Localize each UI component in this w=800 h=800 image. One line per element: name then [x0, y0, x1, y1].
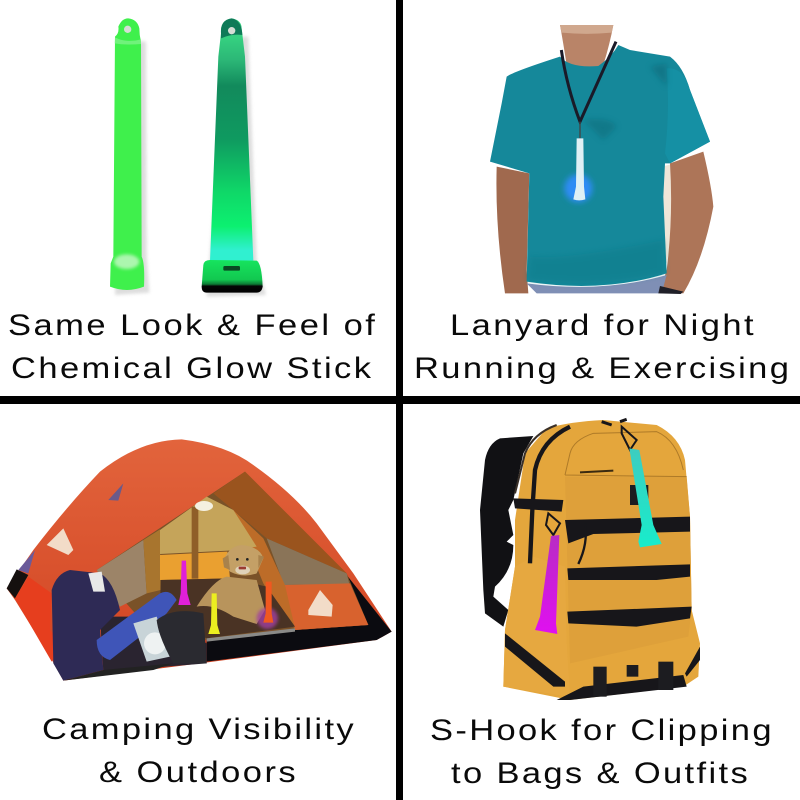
illustration: man wearing shirt with lanyard: [490, 25, 713, 294]
caption: lanyard: [414, 308, 789, 384]
caption: same look and feel: Chemical Glow Stick: [11, 351, 372, 384]
caption: same look and feel: Same Look & Feel of: [8, 308, 376, 341]
illustration: tent with dog and glow sticks: [7, 439, 392, 681]
tent logo marks: [47, 528, 73, 555]
seams: [565, 432, 687, 477]
panel: camping: [7, 439, 392, 681]
lower clothes: [527, 275, 667, 293]
back strap: [480, 436, 533, 627]
glow stick pendant: [564, 138, 592, 202]
magenta glow stick: [535, 535, 559, 634]
shirt: [490, 45, 710, 286]
caption: camping: [42, 712, 355, 788]
ground black edge: [207, 575, 392, 662]
caption: same look and feel: [8, 308, 376, 384]
left arm: [496, 167, 529, 293]
caption: s-hook: to Bags & Outfits: [451, 756, 748, 789]
camping gear: [52, 570, 207, 681]
lamp: [195, 501, 213, 511]
caption: s-hook: [430, 713, 772, 789]
lanyard straps: [561, 42, 616, 122]
panel: lanyard: [490, 25, 713, 294]
panel: s-hook on backpack: [480, 419, 700, 700]
panel: same look and feel: [110, 18, 266, 297]
side black strip and red panel: [7, 569, 28, 598]
caption: camping: Camping Visibility: [42, 712, 355, 745]
cyan glow stick: [629, 448, 662, 547]
icon: lit green glow stick: [202, 18, 266, 297]
caption: camping: & Outdoors: [99, 755, 296, 788]
caption: lanyard: Running & Exercising: [414, 351, 789, 384]
neck: [560, 25, 613, 69]
caption: s-hook: S-Hook for Clipping: [430, 713, 772, 746]
dog: [197, 545, 265, 624]
caption: lanyard: Lanyard for Night: [450, 308, 754, 341]
icon: unlit green glow stick: [110, 18, 149, 295]
guy line tab: [108, 483, 123, 501]
s-hook left: [546, 513, 560, 535]
background wall glimpses: [662, 163, 675, 263]
zippers and straps: [530, 427, 570, 563]
right arm: [660, 152, 713, 293]
tent shell: [7, 439, 392, 681]
glow sticks in tent: [178, 561, 278, 634]
s-hook top: [622, 427, 637, 450]
illustration: yellow backpack with glow sticks: [480, 419, 700, 700]
backpack body: [503, 420, 700, 700]
tent interior: [97, 472, 368, 640]
